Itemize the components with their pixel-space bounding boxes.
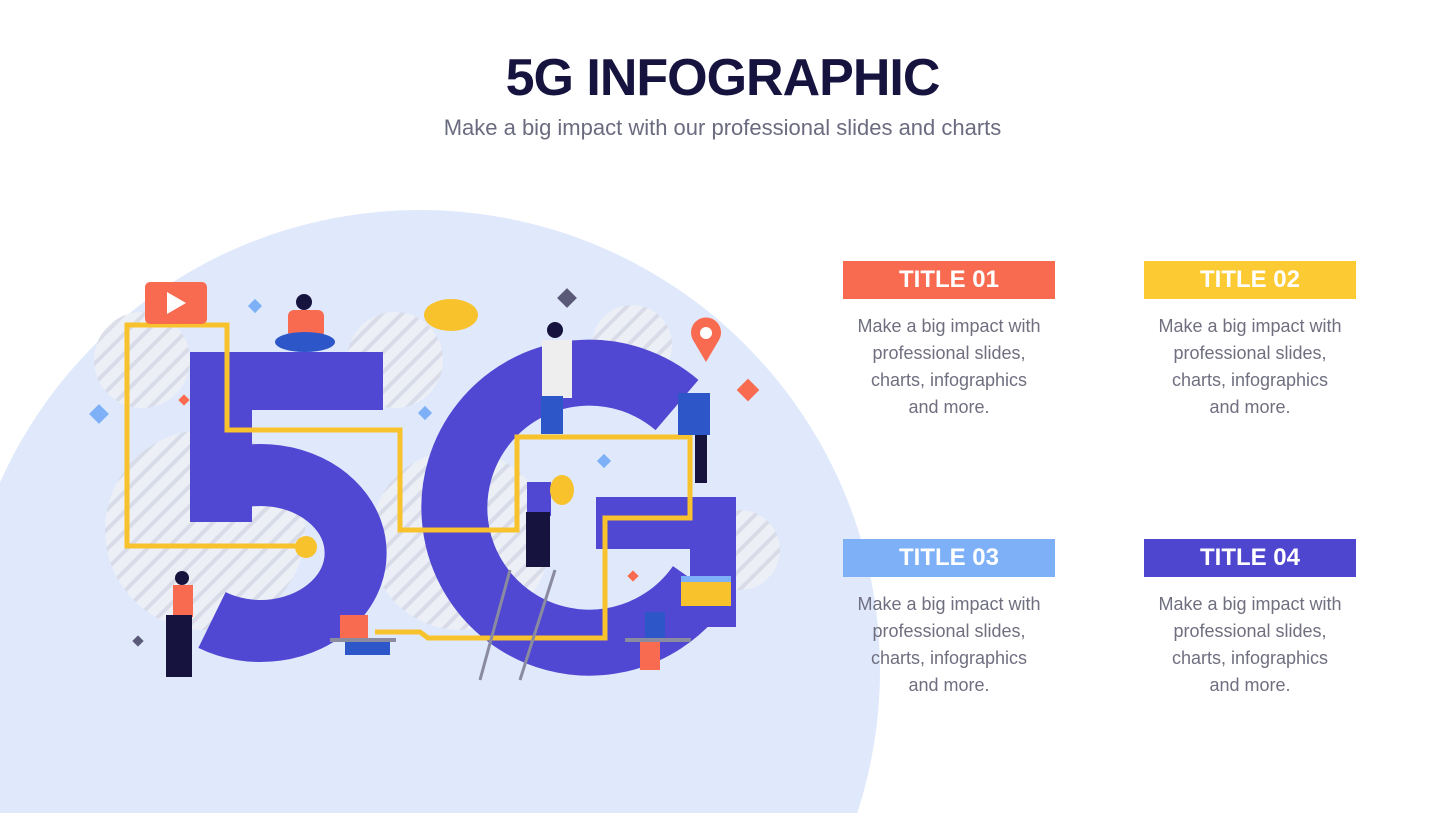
title: 5G INFOGRAPHIC <box>506 49 939 107</box>
card: title 03: TITLE 03 <box>899 544 999 571</box>
card: title 02: TITLE 02 <box>1200 266 1300 293</box>
card: title 01: TITLE 01 <box>899 266 999 293</box>
card: title 04: TITLE 04 <box>1200 544 1300 571</box>
background circle <box>0 210 880 813</box>
icon: map pin <box>691 318 721 362</box>
card: title 03: Make a big impact with professional slides, charts, infographics and more. <box>857 594 1041 695</box>
card: title 01: Make a big impact with professional slides, charts, infographics and more. <box>857 316 1041 417</box>
card: title 02: Make a big impact with professional slides, charts, infographics and more. <box>1158 316 1342 417</box>
icon: chat bubble <box>424 299 478 331</box>
people <box>166 294 710 680</box>
diamonds <box>89 288 759 647</box>
yellow network line <box>127 325 305 546</box>
card: title 03 <box>843 539 1055 695</box>
card: title 04: Make a big impact with professional slides, charts, infographics and more. <box>1158 594 1342 695</box>
digit 5 <box>190 352 383 631</box>
window <box>681 576 731 606</box>
card: title 04 <box>1144 539 1356 695</box>
subtitle: Make a big impact with our professional slides and charts <box>444 115 1001 140</box>
illustration: 5G <box>0 210 880 813</box>
card: title 01 <box>843 261 1055 417</box>
card: title 02 <box>1144 261 1356 417</box>
letter G <box>454 373 736 643</box>
icon: play button <box>145 282 207 324</box>
